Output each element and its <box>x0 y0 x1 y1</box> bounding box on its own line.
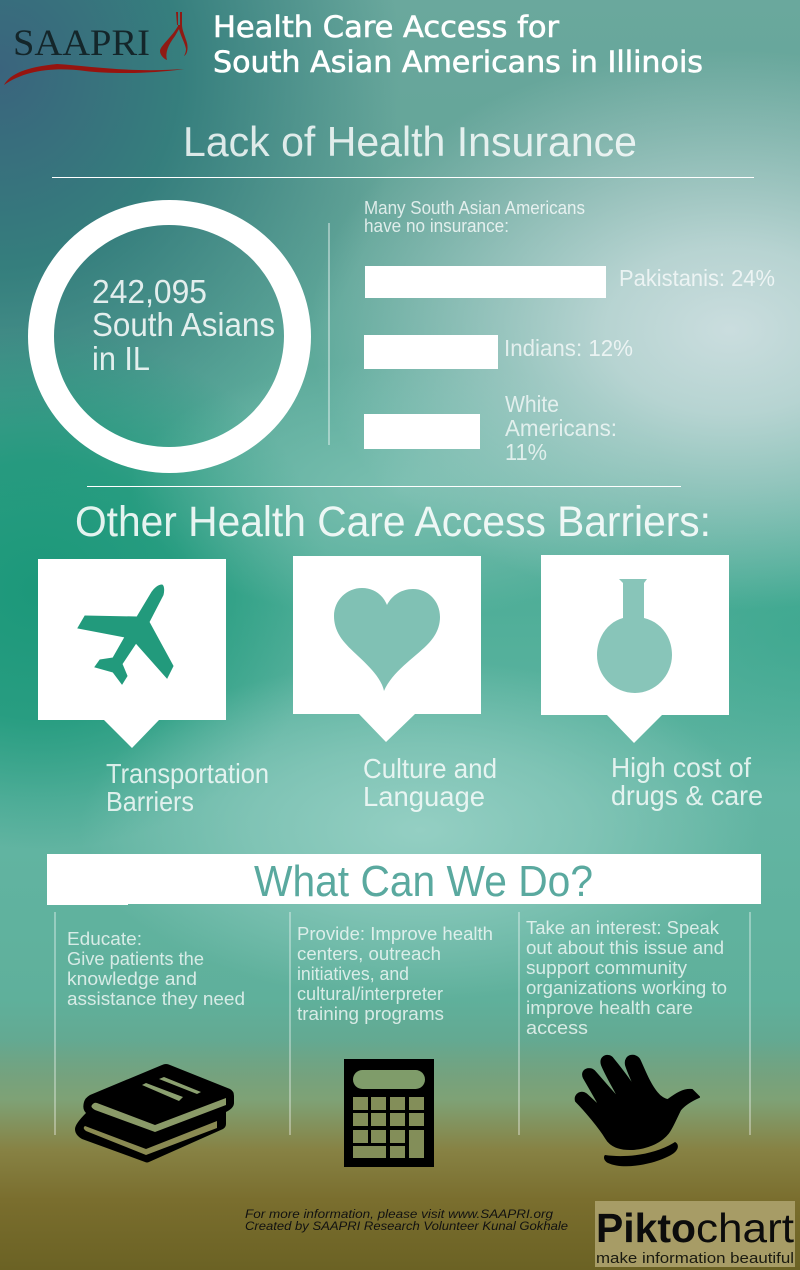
panel: culture and language <box>293 556 497 812</box>
text block: provide: training programs <box>297 1003 444 1024</box>
text block: provide: cultural/interpreter <box>297 983 443 1004</box>
title: Health Care Access for <box>213 10 559 44</box>
text block: provide: initiatives, and <box>297 963 409 984</box>
footer text: Created by SAAPRI Research Volunteer Kunal Gokhale <box>245 1219 568 1233</box>
bar chart: no insurance: have no insurance: <box>364 216 509 236</box>
text block: educate: Give patients the <box>67 948 204 969</box>
icon: airplane <box>78 585 173 684</box>
text block: take an interest: organizations working to <box>526 977 727 998</box>
text block: provide: Provide: Improve health <box>297 923 493 944</box>
text block: take an interest: out about this issue and <box>526 937 724 958</box>
panel: high cost of drugs and care: drugs & care <box>611 780 763 811</box>
logo: Piktochart <box>595 1201 795 1267</box>
text block: take an interest: support community <box>526 957 688 978</box>
logo: SAAPRI <box>4 12 188 85</box>
icon: hand <box>576 1056 699 1166</box>
banner: What Can We Do?: What Can We Do? <box>254 857 593 906</box>
panel: transportation barriers <box>38 559 269 817</box>
bar chart: no insurance: Pakistanis: 24% <box>619 265 775 291</box>
text block: take an interest <box>526 917 727 1038</box>
panel: culture and language: Culture and <box>363 753 497 784</box>
text block: provide <box>297 923 493 1024</box>
title: South Asian Americans in Illinois <box>213 45 703 79</box>
heading: Other Health Care Access Barriers: Other Health Care Access Barriers: <box>75 498 711 546</box>
bar chart: no insurance: White <box>505 391 559 417</box>
heading: Lack of Health Insurance: Lack of Health Insurance <box>183 118 637 165</box>
title <box>213 10 703 79</box>
banner: What Can We Do? <box>47 854 761 906</box>
bar chart: no insurance: Indians: 12% <box>504 335 633 361</box>
bar chart: no insurance: Many South Asian Americans <box>364 198 585 218</box>
panel: transportation barriers: Transportation <box>106 758 269 789</box>
logo: Piktochart: Pikto <box>596 1205 696 1251</box>
donut: 242,095 South Asians in IL: South Asians <box>92 306 275 343</box>
logo: SAAPRI: SAAPRI <box>13 23 150 64</box>
panel: transportation barriers: Barriers <box>106 786 194 817</box>
panel: high cost of drugs and care <box>541 555 763 811</box>
icon: calculator <box>344 1059 434 1167</box>
logo: Piktochart: chart <box>696 1205 795 1251</box>
text block: educate: assistance they need <box>67 988 245 1009</box>
icon: books <box>75 1064 234 1162</box>
bar chart: no insurance: 11% <box>505 439 547 465</box>
donut: 242,095 South Asians in IL <box>28 200 311 473</box>
text block: take an interest: improve health care <box>526 997 693 1018</box>
bar chart: no insurance: Americans: <box>505 415 617 441</box>
text block: educate <box>67 928 245 1009</box>
footer text: For more information, please visit www.SAAPRI.org <box>245 1207 553 1221</box>
text block: take an interest: Take an interest: Speak <box>526 917 720 938</box>
text block: provide: centers, outreach <box>297 943 441 964</box>
bar chart: no insurance <box>364 198 775 465</box>
icon: flask <box>597 579 672 693</box>
icon: heart <box>334 588 440 691</box>
logo: Piktochart: make information beautiful <box>596 1250 794 1267</box>
donut: 242,095 South Asians in IL: 242,095 <box>92 273 207 310</box>
panel: culture and language: Language <box>363 781 485 812</box>
text block: educate: Educate: <box>67 928 142 949</box>
text block: take an interest: access <box>526 1017 588 1038</box>
donut: 242,095 South Asians in IL: in IL <box>92 340 150 377</box>
text block: educate: knowledge and <box>67 968 197 989</box>
footer text <box>245 1207 568 1233</box>
panel: high cost of drugs and care: High cost of <box>611 752 751 783</box>
